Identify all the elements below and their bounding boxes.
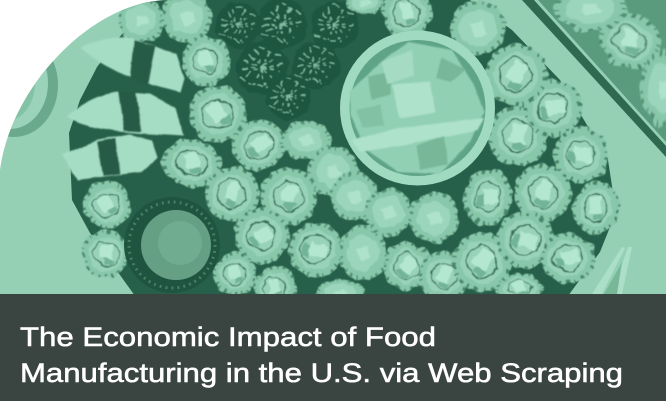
nigiri 1 (80, 37, 184, 92)
platter (69, 0, 616, 296)
title text: The Economic Impact of Food (20, 322, 436, 352)
small plate at left (8, 61, 58, 137)
sauce bowl (124, 197, 220, 293)
nigiri pieces (62, 37, 184, 180)
table surface (0, 0, 666, 294)
nigiri 3 (62, 134, 158, 180)
title text: Manufacturing in the U.S. via Web Scraping (20, 358, 623, 388)
title bar (0, 294, 666, 401)
chopsticks (592, 247, 632, 294)
photo: duotone sushi platter (0, 0, 666, 310)
sushi rolls (75, 0, 623, 310)
nigiri 2 (66, 92, 184, 136)
upper left rolls (118, 0, 164, 43)
maki rolls (188, 84, 248, 144)
ginger bowl (340, 30, 495, 186)
seaweed rolls (215, 2, 261, 48)
wooden board top right (522, 0, 666, 157)
